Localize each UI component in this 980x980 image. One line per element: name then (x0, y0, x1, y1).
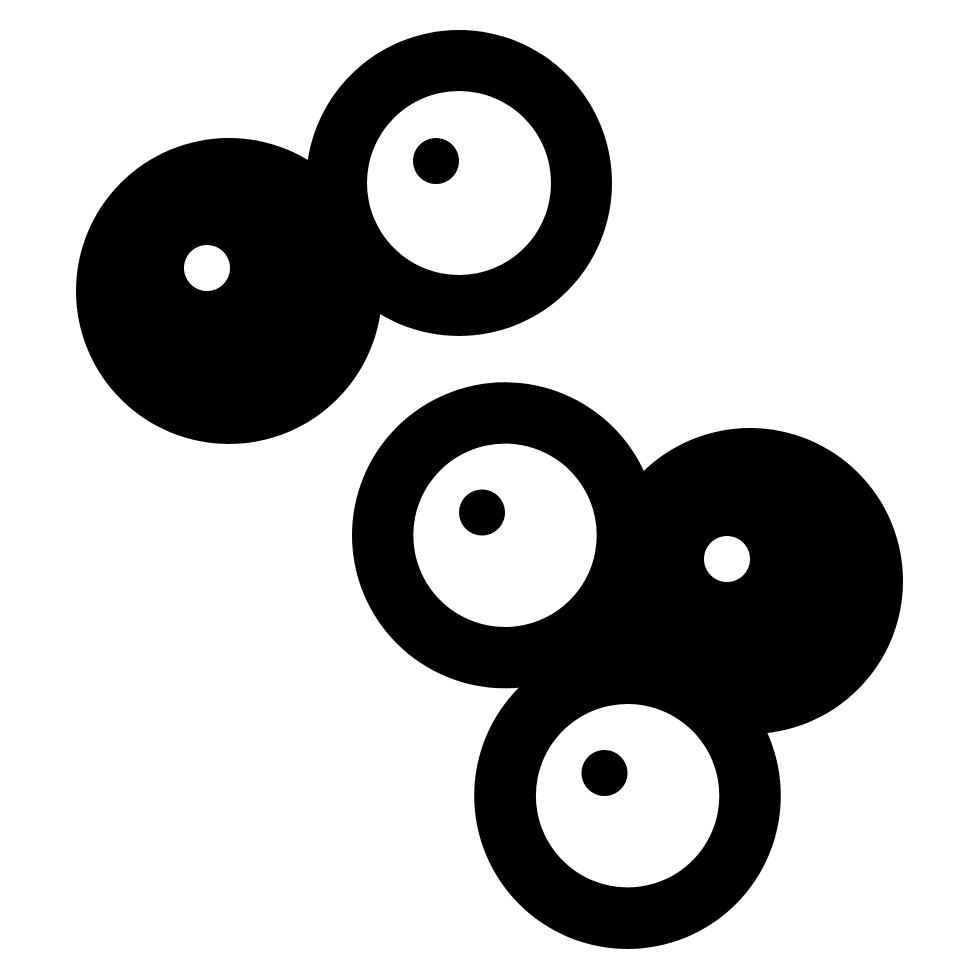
solid cell right (597, 428, 903, 734)
ring cell left (352, 382, 658, 688)
solid cell upper left (76, 138, 382, 444)
ring cell upper right (306, 30, 612, 336)
icon: lower cell cluster (352, 382, 903, 949)
ring cell bottom (474, 642, 781, 949)
icon: upper cell cluster (76, 30, 612, 444)
